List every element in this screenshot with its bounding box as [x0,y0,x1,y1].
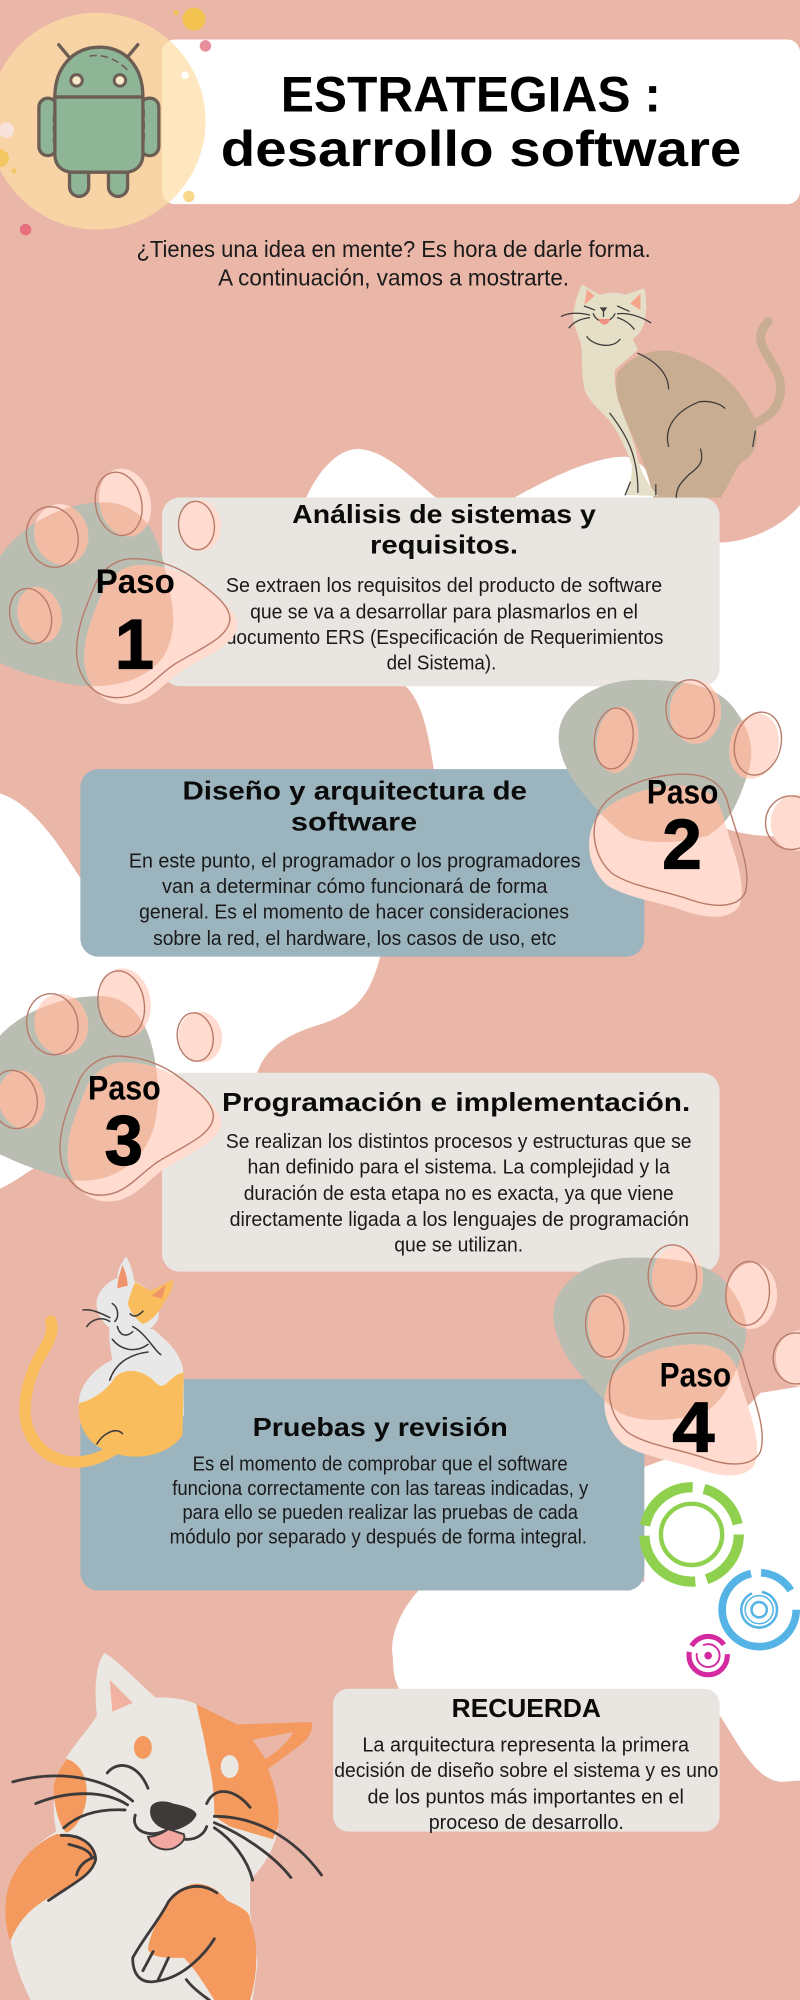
text block: paso 2: van a determinar cómo funcionará de forma [162,876,548,898]
icon: paw 2 [559,680,800,917]
label: paso 4: Paso [660,1356,731,1394]
panel: paso 4 box [80,1379,644,1591]
heading: paso 2 [182,776,527,836]
text block: recuerda: La arquitectura representa la primera [362,1734,690,1756]
text block: paso 3: duración de esta etapa no es exacta, ya que viene [244,1183,674,1205]
heading: paso 1 [292,499,596,560]
heading: paso 1: Análisis de sistemas y [292,499,596,529]
text block: recuerda: proceso de desarrollo. [429,1812,624,1834]
panel: paso 3 box [162,1073,720,1272]
white background blob: lower right [392,1386,800,1782]
white background blob: middle [0,449,800,1189]
label: paso 1: Paso [96,563,175,601]
label: paso 2: Paso [647,774,718,812]
peach circle [0,13,205,230]
heading: paso 2: software [291,806,417,836]
heading: paso 3: Programación e implementación. [222,1087,690,1117]
text block: paso 2: En este punto, el programador o los programadores [129,850,581,872]
text block: paso 4: para ello se pueden realizar las pruebas de cada [182,1502,579,1524]
icon: android robot [39,45,159,196]
subtitle [137,236,651,291]
subtitle: ¿Tienes una idea en mente? Es hora de darle forma. [137,236,651,262]
illustration: beige cat [561,284,781,497]
label: paso 3: Paso [88,1069,161,1107]
icon: green gear rings [644,1487,739,1582]
panel: paso 2 box [80,769,644,957]
label: paso 3 [88,1069,161,1180]
heading: recuerda: RECUERDA [452,1693,601,1723]
text block: recuerda: decisión de diseño sobre el sistema y es uno [334,1760,718,1782]
text block: paso 4: Es el momento de comprobar que el software [193,1454,568,1476]
text block: recuerda [334,1734,718,1834]
text block: paso 1 [226,575,663,675]
text block: paso 4: módulo por separado y después de forma integral. [170,1526,587,1548]
text block: paso 1: que se va a desarrollar para plasmarlos en el [250,602,638,624]
label: paso 1 [96,563,175,683]
text block: paso 3: Se realizan los distintos procesos y estructuras que se [226,1131,692,1153]
text block: paso 1: documento ERS (Especificación de Requerimientos [226,627,663,649]
text block: paso 1: del Sistema). [387,653,496,675]
icon: paw 4 [554,1245,800,1475]
text block: paso 4 [170,1454,589,1548]
heading: paso 4: Pruebas y revisión [253,1412,508,1442]
text block: paso 3: que se utilizan. [394,1234,523,1256]
text block: paso 4: funciona correctamente con las tareas indicadas, y [172,1478,589,1500]
label: paso 4: 4 [672,1388,715,1467]
heading: paso 2: Diseño y arquitectura de [182,776,527,806]
icon: magenta gear rings [689,1636,727,1675]
label: paso 4 [660,1356,731,1467]
text block: paso 3: directamente ligada a los lenguajes de programación [230,1209,689,1231]
title banner [162,40,800,204]
label: paso 1: 1 [115,604,154,683]
decorative confetti dots [20,8,211,235]
label: paso 2: 2 [662,805,702,884]
illustration: big smiling cat [5,1653,322,2000]
label: paso 3: 3 [105,1101,143,1180]
subtitle: A continuación, vamos a mostrarte. [218,265,569,291]
icon: blue gear rings [722,1573,796,1647]
text block: paso 1: Se extraen los requisitos del producto de software [226,575,662,597]
panel: recuerda box [333,1689,720,1832]
text block: paso 2: sobre la red, el hardware, los casos de uso, etc [153,928,556,950]
text block: paso 3: han definido para el sistema. La complejidad y la [248,1156,670,1178]
heading: paso 1: requisitos. [370,530,518,560]
illustration: orange and white cat [25,1256,184,1462]
text block: recuerda: de los puntos más importantes en el [367,1787,684,1809]
title: ESTRATEGIAS : [281,67,661,123]
icon: paw 3 [0,964,225,1202]
title [221,67,741,177]
icon: paw 1 [0,463,238,704]
title: desarrollo software [221,121,741,177]
label: paso 2 [647,774,718,884]
panel: paso 1 box [162,497,720,686]
text block: paso 2: general. Es el momento de hacer consideraciones [139,901,569,923]
text block: paso 2 [129,850,581,950]
text block: paso 3 [226,1131,692,1256]
